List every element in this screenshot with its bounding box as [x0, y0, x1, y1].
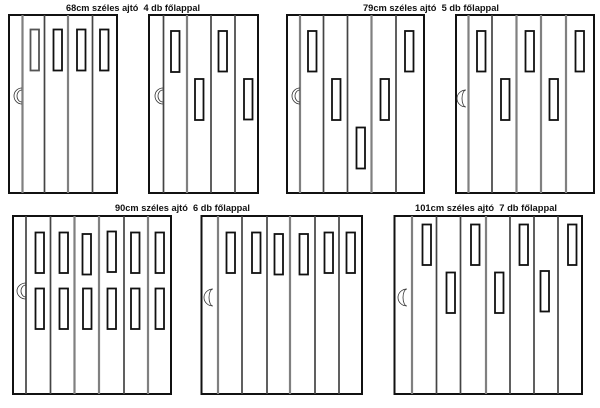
door: 90cm, one row of windows: [202, 216, 362, 394]
door: 68cm, aligned windows: [9, 15, 117, 193]
door: 101cm, staggered windows: [394, 216, 582, 394]
door: 68cm, staggered windows: [149, 15, 258, 193]
door: 79cm, second variant: [456, 15, 594, 193]
heading: 68cm door: 68cm széles ajtó 4 db főlappal: [66, 3, 200, 14]
heading: 79cm door: 79cm széles ajtó 5 db főlappal: [363, 3, 499, 14]
heading: 90cm door: 90cm széles ajtó 6 db főlappal: [115, 203, 250, 214]
door: 79cm, first variant: [287, 15, 424, 193]
door: 90cm, two rows of windows: [13, 216, 171, 394]
heading: 101cm door: 101cm széles ajtó 7 db főlappal: [415, 203, 557, 214]
